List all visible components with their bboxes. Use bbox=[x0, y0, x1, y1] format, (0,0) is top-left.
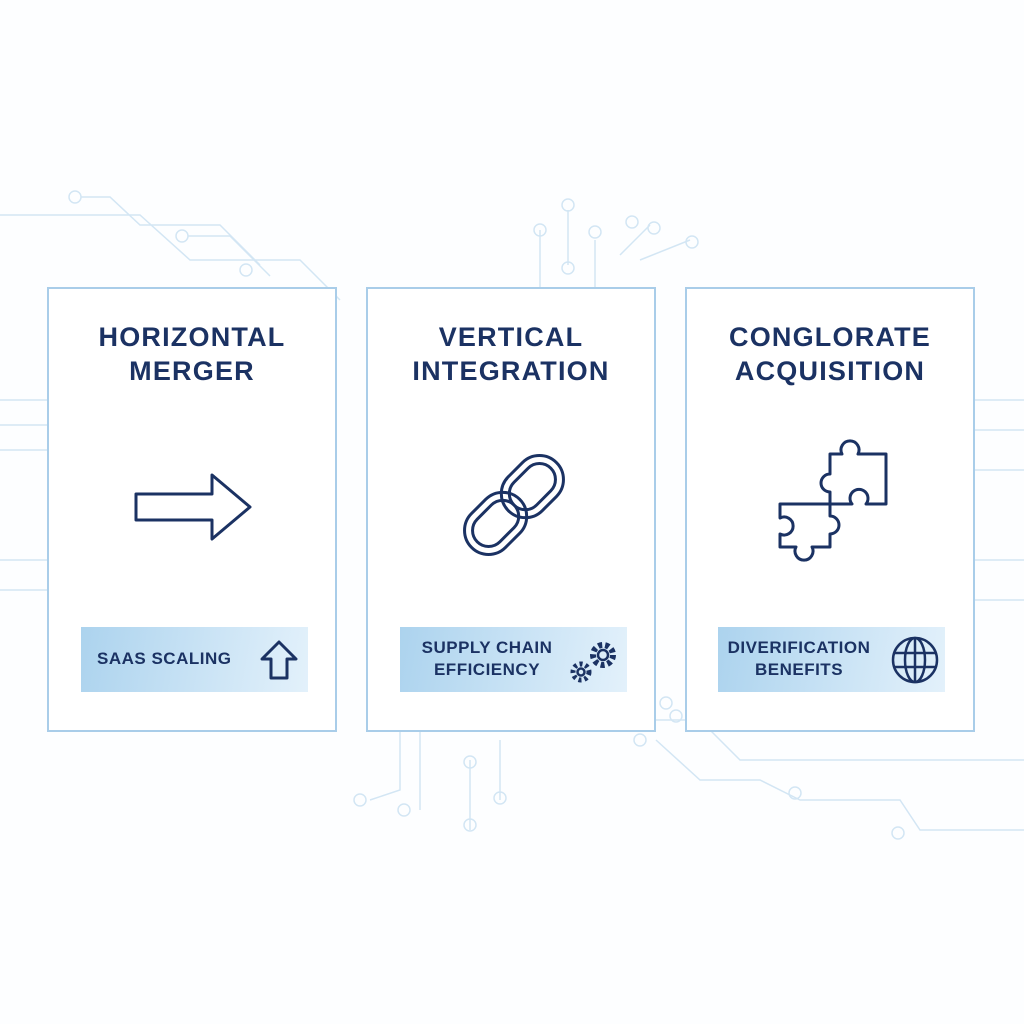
panel: vertical integration bbox=[366, 287, 656, 732]
icon: chain link bbox=[463, 454, 565, 556]
heading: horizontal merger: HORIZONTAL bbox=[98, 322, 285, 352]
heading: conglomerate acquisition: CONGLORATE bbox=[729, 322, 931, 352]
icon: puzzle pieces bbox=[778, 439, 888, 562]
badge: diverification benefits: DIVERIFICATION bbox=[728, 638, 870, 657]
badge: supply chain efficiency bbox=[400, 627, 627, 692]
heading: vertical integration: VERTICAL bbox=[439, 322, 583, 352]
icon: up arrow bbox=[260, 640, 298, 680]
icon: gears bbox=[570, 642, 616, 682]
heading: conglomerate acquisition bbox=[729, 322, 931, 386]
badge: diverification benefits bbox=[718, 627, 945, 692]
badge: diverification benefits: BENEFITS bbox=[755, 660, 843, 679]
badge: saas scaling bbox=[81, 627, 308, 692]
badge: supply chain efficiency: SUPPLY CHAIN bbox=[422, 638, 552, 657]
icon: right arrow bbox=[134, 474, 252, 541]
heading: horizontal merger bbox=[98, 322, 285, 386]
panel: conglomerate acquisition bbox=[685, 287, 975, 732]
badge: supply chain efficiency: EFFICIENCY bbox=[434, 660, 540, 679]
heading: vertical integration bbox=[412, 322, 610, 386]
badge: saas scaling: SAAS SCALING bbox=[97, 649, 231, 668]
panel: horizontal merger bbox=[47, 287, 337, 732]
heading: vertical integration: INTEGRATION bbox=[412, 356, 610, 386]
heading: conglomerate acquisition: ACQUISITION bbox=[735, 356, 925, 386]
heading: horizontal merger: MERGER bbox=[129, 356, 255, 386]
icon: globe bbox=[892, 636, 938, 684]
